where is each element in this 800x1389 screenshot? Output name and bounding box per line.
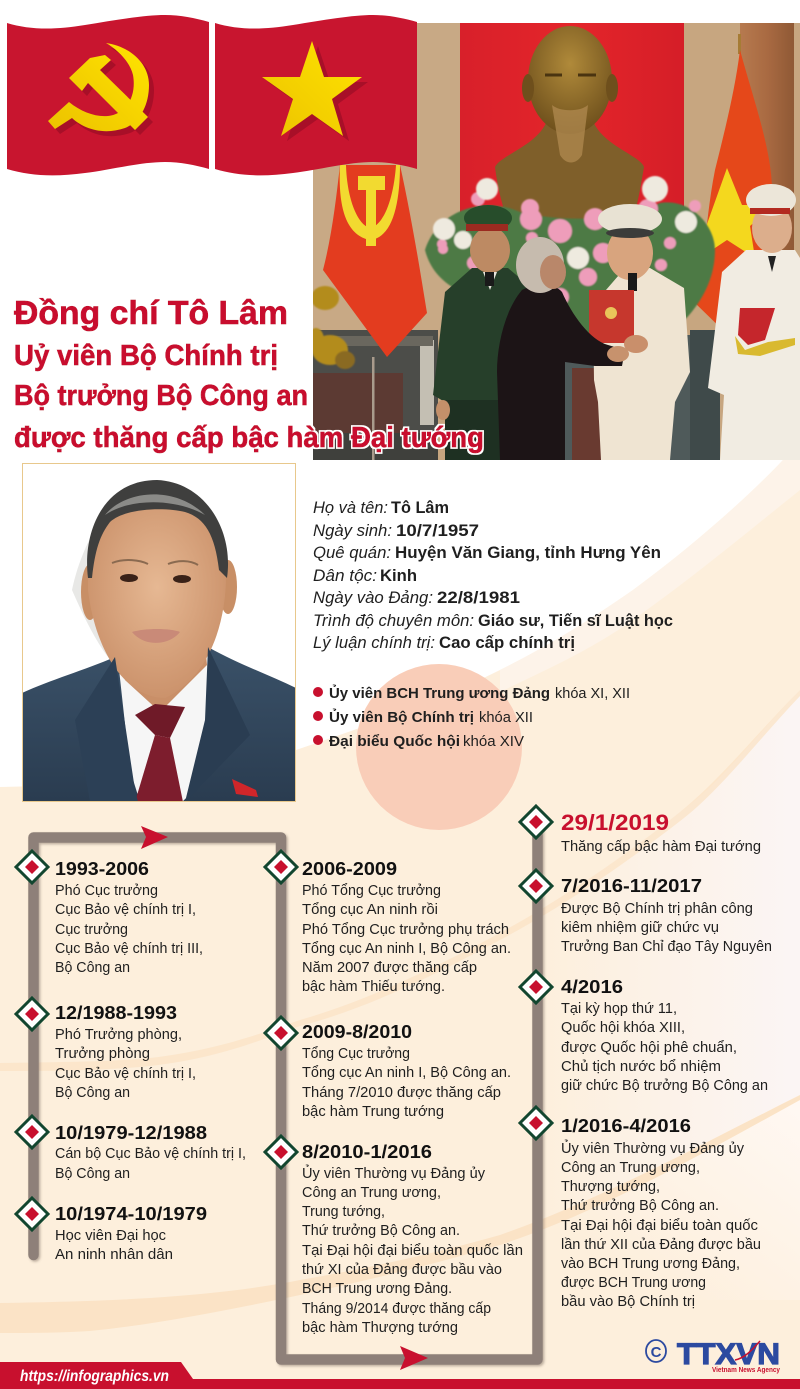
portrait of Tô Lâm <box>22 463 296 802</box>
personal info: Ngày vào Đảng: <box>313 589 433 607</box>
lotus arrangement <box>425 176 715 335</box>
entry 10/1974-10/1979: An ninh nhân dân <box>55 1246 173 1263</box>
officer in white <box>589 204 690 460</box>
positions list: khóa XII <box>479 709 533 726</box>
entry 8/2010-1/2016: Tháng 9/2014 được thăng cấp <box>302 1300 491 1317</box>
entry 1993-2006: 1993-2006 <box>55 858 149 879</box>
photo: promotion ceremony <box>308 23 800 460</box>
bronze bust of Ho Chi Minh <box>495 26 644 225</box>
entry 7/2016-11/2017 <box>561 875 772 955</box>
entry 8/2010-1/2016: 8/2010-1/2016 <box>302 1141 432 1162</box>
title: được thăng cấp bậc hàm Đại tướng <box>14 422 484 454</box>
entry 8/2010-1/2016: Ủy viên Thường vụ Đảng ủy <box>302 1164 485 1182</box>
yellow flowers <box>308 286 355 369</box>
stone base right <box>560 330 720 460</box>
entry 10/1974-10/1979: Học viên Đại học <box>55 1227 166 1244</box>
entry 2009-8/2010: Tổng Cục trưởng <box>302 1045 410 1062</box>
footer bar with url <box>0 1362 800 1389</box>
peach circle <box>356 664 522 830</box>
entry 1/2016-4/2016: Công an Trung ương, <box>561 1159 700 1176</box>
timeline markers <box>16 806 552 1230</box>
entry 1/2016-4/2016: bầu vào Bộ Chính trị <box>561 1293 695 1310</box>
icon: yellow star <box>262 41 362 136</box>
general in green <box>433 205 528 460</box>
pillar right <box>740 23 794 250</box>
entry 1/2016-4/2016 <box>561 1115 761 1310</box>
entry 12/1988-1993: 12/1988-1993 <box>55 1002 177 1023</box>
entry 7/2016-11/2017: kiêm nhiệm giữ chức vụ <box>561 919 719 936</box>
positions list: khóa XIV <box>463 733 524 750</box>
entry 12/1988-1993: Trưởng phòng <box>55 1045 150 1062</box>
entry 1/2016-4/2016: Thượng tướng, <box>561 1178 660 1195</box>
entry 1/2016-4/2016: 1/2016-4/2016 <box>561 1115 691 1136</box>
entry 2009-8/2010: 2009-8/2010 <box>302 1021 412 1042</box>
entry 4/2016: Quốc hội khóa XIII, <box>561 1019 685 1036</box>
entry 8/2010-1/2016: Thứ trưởng Bộ Công an. <box>302 1222 460 1239</box>
personal info: Quê quán: <box>313 544 391 562</box>
entry 10/1974-10/1979 <box>55 1203 207 1263</box>
positions list <box>313 684 630 750</box>
entry 1993-2006: Cục trưởng <box>55 921 128 938</box>
personal info: Trình độ chuyên môn: <box>313 612 474 630</box>
logo TTXVN: C <box>651 1344 662 1361</box>
entry 29/1/2019: 29/1/2019 <box>561 810 669 835</box>
entry 1993-2006: Cục Bảo vệ chính trị III, <box>55 940 203 957</box>
entry 1/2016-4/2016: Ủy viên Thường vụ Đảng ủy <box>561 1139 744 1157</box>
personal info: Ngày sinh: <box>313 522 392 540</box>
footer bar with url: https://infographics.vn <box>20 1368 169 1385</box>
entry 1/2016-4/2016: Tại Đại hội đại biểu toàn quốc <box>561 1217 758 1234</box>
entry 1/2016-4/2016: Thứ trưởng Bộ Công an. <box>561 1197 719 1214</box>
personal info: Giáo sư, Tiến sĩ Luật học <box>478 612 673 630</box>
entry 7/2016-11/2017: 7/2016-11/2017 <box>561 875 702 896</box>
title <box>14 294 484 454</box>
entry 1993-2006: Bộ Công an <box>55 959 130 976</box>
entry 8/2010-1/2016: BCH Trung ương Đảng. <box>302 1280 452 1297</box>
entry 1/2016-4/2016: được BCH Trung ương <box>561 1274 706 1291</box>
entry 12/1988-1993 <box>55 1002 196 1101</box>
entry 2006-2009: Phó Tổng Cục trưởng phụ trách <box>302 921 509 938</box>
logo TTXVN <box>646 1338 780 1374</box>
entry 8/2010-1/2016: Công an Trung ương, <box>302 1184 441 1201</box>
honor guard <box>708 184 800 460</box>
Vietnam flag <box>696 34 772 324</box>
marble wall left <box>313 23 460 343</box>
entry 2006-2009: Phó Tổng Cục trưởng <box>302 882 441 899</box>
entry 2009-8/2010: Tổng cục An ninh I, Bộ Công an. <box>302 1064 511 1081</box>
entry 2006-2009: bậc hàm Thiếu tướng. <box>302 978 445 995</box>
entry 10/1979-12/1988: Bộ Công an <box>55 1165 130 1182</box>
positions list: khóa XI, XII <box>555 685 630 702</box>
entry 2009-8/2010 <box>302 1021 511 1120</box>
logo TTXVN: TTXVN <box>677 1338 780 1371</box>
entry 29/1/2019 <box>561 810 761 855</box>
entry 10/1979-12/1988: Cán bộ Cục Bảo vệ chính trị I, <box>55 1145 246 1162</box>
entry 8/2010-1/2016: Trung tướng, <box>302 1203 385 1220</box>
entry 12/1988-1993: Phó Trưởng phòng, <box>55 1026 182 1043</box>
entry 8/2010-1/2016 <box>302 1141 523 1336</box>
entry 2006-2009: Tổng cục An ninh I, Bộ Công an. <box>302 940 511 957</box>
flag: Vietnam star <box>215 15 417 175</box>
personal info: Lý luận chính trị: <box>313 634 435 652</box>
personal info <box>313 499 673 652</box>
entry 1993-2006: Cục Bảo vệ chính trị I, <box>55 901 196 918</box>
entry 10/1979-12/1988: 10/1979-12/1988 <box>55 1122 207 1143</box>
title: Bộ trưởng Bộ Công an <box>14 380 308 412</box>
entry 29/1/2019: Thăng cấp bậc hàm Đại tướng <box>561 838 761 855</box>
entry 4/2016: Chủ tịch nước bổ nhiệm <box>561 1058 721 1075</box>
entry 8/2010-1/2016: Tại Đại hội đại biểu toàn quốc lần <box>302 1242 523 1259</box>
entry 2009-8/2010: Tháng 7/2010 được thăng cấp <box>302 1084 501 1101</box>
flag: party hammer and sickle <box>7 15 209 175</box>
entry 7/2016-11/2017: Trưởng Ban Chỉ đạo Tây Nguyên <box>561 938 772 955</box>
entry 2006-2009: 2006-2009 <box>302 858 397 879</box>
personal info: Huyện Văn Giang, tỉnh Hưng Yên <box>395 544 661 562</box>
positions list: Ủy viên BCH Trung ương Đảng <box>329 684 550 702</box>
entry 4/2016: Tại kỳ họp thứ 11, <box>561 1000 677 1017</box>
entry 7/2016-11/2017: Được Bộ Chính trị phân công <box>561 900 753 917</box>
personal info: 22/8/1981 <box>437 589 520 607</box>
entry 2006-2009 <box>302 858 511 995</box>
entry 12/1988-1993: Bộ Công an <box>55 1084 130 1101</box>
personal info: Dân tộc: <box>313 567 377 585</box>
entry 10/1979-12/1988 <box>55 1122 246 1182</box>
stone base left <box>313 330 438 460</box>
red wall panel <box>460 23 684 223</box>
timeline path with arrows <box>34 822 538 1370</box>
entry 4/2016: giữ chức Bộ trưởng Bộ Công an <box>561 1077 768 1094</box>
entry 10/1974-10/1979: 10/1974-10/1979 <box>55 1203 207 1224</box>
icon: hammer and sickle <box>48 43 154 136</box>
entry 2006-2009: Tổng cục An ninh rồi <box>302 901 438 918</box>
arrow top <box>141 826 168 849</box>
personal info: Cao cấp chính trị <box>439 634 575 652</box>
personal info: Họ và tên: <box>313 499 388 517</box>
arrow bottom <box>400 1346 428 1370</box>
personal info: 10/7/1957 <box>396 522 479 540</box>
title: Uỷ viên Bộ Chính trị <box>14 340 278 372</box>
entry 2006-2009: Năm 2007 được thăng cấp <box>302 959 477 976</box>
entry 8/2010-1/2016: thứ XI của Đảng được bầu vào <box>302 1261 502 1278</box>
entry 2009-8/2010: bậc hàm Trung tướng <box>302 1103 444 1120</box>
entry 1993-2006 <box>55 858 203 976</box>
entry 1/2016-4/2016: vào BCH Trung ương Đảng, <box>561 1255 740 1272</box>
entry 4/2016 <box>561 976 768 1094</box>
positions list: Ủy viên Bộ Chính trị <box>329 708 474 726</box>
positions list: Đại biểu Quốc hội <box>329 733 460 750</box>
personal info: Tô Lâm <box>391 499 449 517</box>
personal info: Kinh <box>380 567 417 585</box>
elder in black suit <box>497 237 629 460</box>
entry 8/2010-1/2016: bậc hàm Thượng tướng <box>302 1319 458 1336</box>
title: Đồng chí Tô Lâm <box>14 294 288 331</box>
entry 4/2016: 4/2016 <box>561 976 623 997</box>
entry 12/1988-1993: Cục Bảo vệ chính trị I, <box>55 1065 196 1082</box>
entry 4/2016: được Quốc hội phê chuẩn, <box>561 1039 737 1056</box>
entry 1993-2006: Phó Cục trưởng <box>55 882 158 899</box>
party flag <box>323 165 427 460</box>
logo TTXVN: Vietnam News Agency <box>712 1367 780 1374</box>
entry 1/2016-4/2016: lần thứ XII của Đảng được bầu <box>561 1236 761 1253</box>
